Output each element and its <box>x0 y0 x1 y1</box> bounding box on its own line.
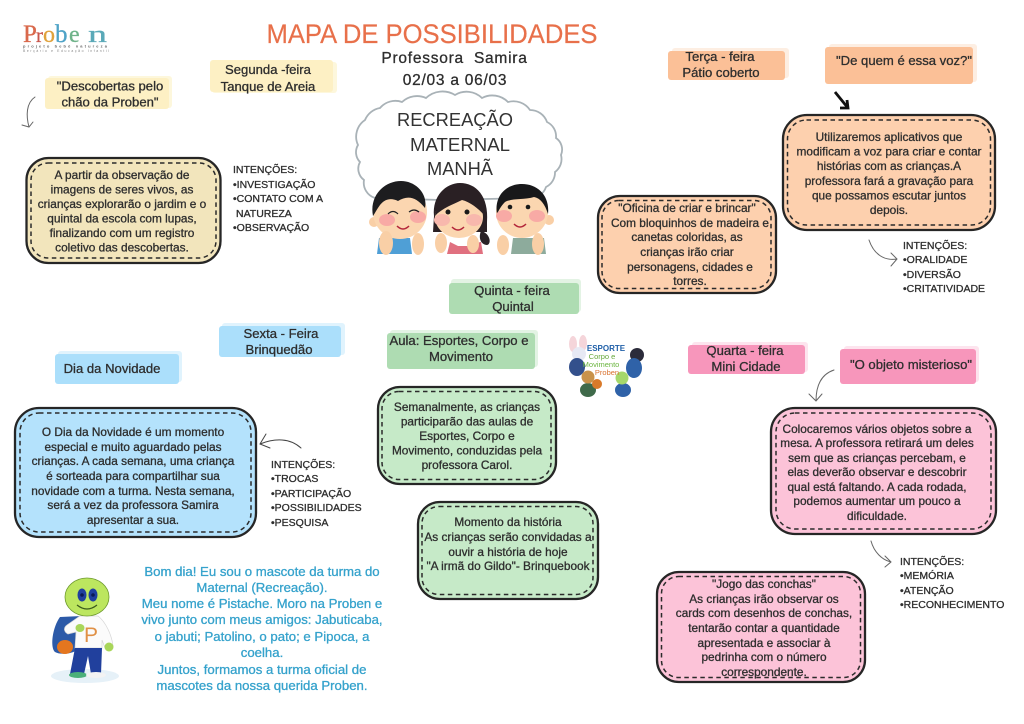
panel: Quarta mystery object: dificuldade. <box>847 509 907 523</box>
label: O objeto misterioso <box>840 346 979 384</box>
text: mascot introduction: vivo junto com meus amigos: Jabuticaba, <box>141 612 383 627</box>
text: Segunda intentions: •CONTATO COM A <box>233 193 323 205</box>
text: mascot introduction: Maternal (Recreação). <box>196 580 328 595</box>
panel: Terça workshop activity: Com bloquinhos de madeira e <box>611 216 769 230</box>
label: De quem é essa voz: "De quem é essa voz?" <box>836 53 972 68</box>
panel: Quinta sports class: Semanalmente, as crianças <box>394 400 540 414</box>
panel: Sexta activity: apresentar a sua. <box>87 513 179 527</box>
panel: Quinta story moment: "A irmã do Gildo"- Brinquebook <box>426 559 590 573</box>
panel: Terça workshop activity: torres. <box>673 274 707 288</box>
panel: Quarta mystery object: mesa. A professora retirará um deles <box>780 436 974 450</box>
panel: Sexta activity: crianças. A cada semana, uma criança <box>32 454 235 468</box>
panel: Segunda activity: coletivo das descobertas. <box>55 240 189 254</box>
panel: Quarta shells game: apresentada e associar à <box>698 636 831 650</box>
illustration: mascot Pistache: P <box>84 624 98 647</box>
panel: Sexta activity: é sorteada para compartilhar sua <box>46 469 220 483</box>
text: Segunda intentions: •INVESTIGAÇÃO <box>233 178 315 191</box>
text: Terça intentions: INTENÇÕES: <box>903 239 967 252</box>
panel: Segunda activity: imagens de seres vivos, as <box>51 182 193 196</box>
text: Segunda intentions: INTENÇÕES: <box>233 163 297 176</box>
label: Descobertas pelo chão da Proben: "Descobertas pelo <box>57 78 163 94</box>
panel: Quinta story moment: Momento da história <box>454 515 562 529</box>
child 1 <box>369 181 427 255</box>
panel: Terça workshop activity: "Oficina de criar e brincar" <box>618 201 756 215</box>
label: Quinta-feira: Quinta - feira <box>474 283 551 298</box>
logo: Proben: Berçário e Educação Infantil <box>23 49 109 53</box>
text: Segunda intentions: NATUREZA <box>236 208 292 220</box>
text: Quarta intentions: •MEMÓRIA <box>900 569 954 582</box>
subtitle: teacher and dates: Professora Samira <box>381 50 528 67</box>
text: Quarta intentions: •ATENÇÃO <box>900 584 954 597</box>
panel: Sexta activity <box>15 408 256 537</box>
panel: Terça workshop activity: crianças irão criar <box>640 245 734 259</box>
sticker: Esporte Corpo e Movimento: ESPORTE <box>587 344 626 353</box>
panel: Quarta shells game: pedrinha com o número <box>701 650 827 664</box>
panel: Quinta sports class: professora Carol. <box>422 458 512 472</box>
text: mascot introduction: Juntos, formamos a turma oficial de <box>158 662 366 677</box>
text: Terça intentions: •CRITATIVIDADE <box>903 283 985 295</box>
text: Quarta intentions: INTENÇÕES: <box>900 555 964 568</box>
panel: Quinta sports class: participarão das aulas de <box>401 414 534 428</box>
panel: Segunda activity: finalizando com um registro <box>50 226 195 240</box>
label: Quarta-feira <box>688 342 808 374</box>
panel: Sexta activity: O Dia da Novidade é um momento <box>42 425 225 439</box>
label: Quinta-feira <box>449 279 581 314</box>
label: Sexta-feira <box>219 323 345 357</box>
sticker: Esporte Corpo e Movimento: Movimento <box>583 360 619 369</box>
panel: Quarta mystery object: Colocaremos vários objetos sobre a <box>783 422 972 436</box>
label: Aula Esportes: Movimento <box>429 349 493 364</box>
text: mascot introduction: mascotes da nossa querida Proben. <box>156 678 368 693</box>
panel: Quinta sports class: Movimento, conduzidas pela <box>392 444 542 458</box>
panel: Sexta activity: especial e muito aguardado pelas <box>44 440 222 454</box>
panel: Quarta mystery object <box>771 408 996 534</box>
arrow: black to voice box <box>835 92 848 108</box>
text: Terça intentions: •ORALIDADE <box>903 254 967 266</box>
logo: Proben: b <box>55 21 68 48</box>
panel: Quinta sports class: Esportes, Corpo e <box>419 429 515 443</box>
label: Aula Esportes <box>387 330 538 369</box>
arrow: to Terça intentions <box>869 240 897 266</box>
cloud: Recreação Maternal Manhã <box>356 91 562 200</box>
title: MAPA DE POSSIBILIDADES <box>266 19 598 49</box>
panel: Quinta story moment: As crianças serão convidadas a <box>424 530 592 544</box>
panel: Quarta shells game: tentarão contar a quantidade <box>688 621 840 635</box>
panel: Quarta mystery object: qual está faltando. A cada rodada, <box>787 480 967 494</box>
panel: Terça voice activity: histórias com as crianças.A <box>817 159 961 173</box>
panel: Quarta mystery object: sem que as crianças percebam, e <box>788 451 966 465</box>
panel: Segunda activity: A partir da observação de <box>55 168 190 182</box>
panel: Quarta shells game: correspondente. <box>721 665 807 679</box>
label: Terça-feira <box>668 48 789 80</box>
label: Dia da Novidade: Dia da Novidade <box>64 361 160 376</box>
label: Quarta-feira: Quarta - feira <box>706 343 784 358</box>
text: Segunda intentions: •OBSERVAÇÃO <box>233 221 309 234</box>
arrow: to Quarta intentions <box>871 541 891 567</box>
panel: Quarta shells game: "Jogo das conchas" <box>712 577 816 591</box>
label: Dia da Novidade <box>55 351 182 384</box>
subtitle: teacher and dates: 02/03 a 06/03 <box>403 72 507 89</box>
label: Aula Esportes: Aula: Esportes, Corpo e <box>389 333 529 348</box>
panel: Quarta mystery object: elas deverão observar e descobrir <box>787 465 967 479</box>
panel: Sexta activity: novidade com a turma. Nesta semana, <box>31 484 235 498</box>
label: O objeto misterioso: "O objeto misterioso" <box>850 357 972 372</box>
logo: Proben: r <box>36 23 43 47</box>
arrow: to yellow box <box>22 97 35 127</box>
panel: Quarta shells game: As crianças irão observar os <box>689 592 839 606</box>
panel: Quinta story moment: ouvir a história de hoje <box>448 545 568 559</box>
panel: Sexta activity: será a vez da professora Samira <box>47 498 219 512</box>
logo: Proben: P <box>23 21 37 48</box>
label: Sexta-feira: Sexta - Feira <box>244 326 319 341</box>
label: Quarta-feira: Mini Cidade <box>711 359 781 374</box>
arrow: from Sexta intentions <box>260 434 301 448</box>
subtitle: teacher and dates <box>381 50 528 89</box>
panel: Quarta mystery object: podemos aumentar um pouco a <box>793 494 961 508</box>
text: mascot introduction: coelha. <box>241 645 283 660</box>
text: Sexta intentions: •POSSIBILIDADES <box>271 502 362 514</box>
text: Sexta intentions: INTENÇÕES: <box>271 458 335 471</box>
logo: Proben: n <box>88 22 107 48</box>
illustration: three children <box>369 181 554 255</box>
text: Terça intentions: •DIVERSÃO <box>903 268 961 281</box>
logo: Proben <box>23 21 109 53</box>
label: Quinta-feira: Quintal <box>492 299 534 314</box>
panel: Terça workshop activity <box>598 196 776 293</box>
label: De quem é essa voz <box>825 44 977 84</box>
panel: Segunda activity: crianças explorarão o jardim e o <box>38 197 207 211</box>
text: Sexta intentions: •TROCAS <box>271 473 318 485</box>
sticker: Esporte Corpo e Movimento: Corpo e <box>589 352 615 361</box>
panel: Terça voice activity: depois. <box>870 203 908 217</box>
panel: Terça workshop activity: personagens, cidades e <box>627 260 753 274</box>
panel: Quinta story moment <box>418 502 598 599</box>
panel: Terça voice activity: professora fará a gravação para <box>805 174 974 188</box>
logo: Proben: o <box>43 22 55 48</box>
child 3 <box>496 184 554 255</box>
panel: Quarta shells game: cards com desenhos de conchas, <box>676 606 852 620</box>
text: Quarta intentions: •RECONHECIMENTO <box>900 599 1004 611</box>
label: Segunda-feira <box>210 60 337 94</box>
logo: Proben: projeto bebê natureza <box>23 44 108 48</box>
label: Segunda-feira: Segunda -feira <box>225 62 312 77</box>
text: mascot introduction: Bom dia! Eu sou o mascote da turma do <box>144 564 380 579</box>
arrow: to Quarta box <box>809 370 834 401</box>
child 2 <box>433 183 490 254</box>
cloud: Recreação Maternal Manhã: RECREAÇÃO <box>397 109 513 130</box>
panel: Segunda activity <box>26 158 220 263</box>
panel: Terça voice activity: que possamos escutar juntos <box>812 188 966 202</box>
label: Terça-feira: Terça - feira <box>685 49 755 64</box>
logo: Proben: e <box>69 22 80 48</box>
label: Sexta-feira: Brinquedão <box>246 342 312 357</box>
panel: Terça voice activity: modificam a voz para criar e contar <box>797 144 982 158</box>
sticker: Esporte Corpo e Movimento: Proben <box>595 368 619 377</box>
panel: Quinta sports class <box>378 387 556 484</box>
cloud: Recreação Maternal Manhã: MANHÃ <box>427 158 493 179</box>
sticker: Esporte Corpo e Movimento <box>569 335 644 397</box>
cloud: Recreação Maternal Manhã: MATERNAL <box>410 135 510 155</box>
panel: Quarta shells game <box>657 572 865 682</box>
text: Sexta intentions: •PARTICIPAÇÃO <box>271 487 351 500</box>
text: mascot introduction: o jabuti; Patolino, o pato; e Pipoca, a <box>155 629 370 644</box>
panel: Terça voice activity: Utilizaremos aplicativos que <box>816 130 963 144</box>
label: Descobertas pelo chão da Proben <box>45 76 172 110</box>
label: Terça-feira: Pátio coberto <box>682 65 760 80</box>
panel: Terça voice activity <box>783 115 995 230</box>
label: Segunda-feira: Tanque de Areia <box>221 79 316 94</box>
label: Descobertas pelo chão da Proben: chão da Proben" <box>61 94 159 110</box>
text: Sexta intentions: •PESQUISA <box>271 517 328 529</box>
panel: Segunda activity: quintal da escola com lupas, <box>47 212 197 226</box>
panel: Terça workshop activity: canetas coloridas, as <box>631 230 743 244</box>
text: mascot introduction: Meu nome é Pistache. Moro na Proben e <box>142 596 382 611</box>
illustration: mascot Pistache <box>51 578 119 683</box>
